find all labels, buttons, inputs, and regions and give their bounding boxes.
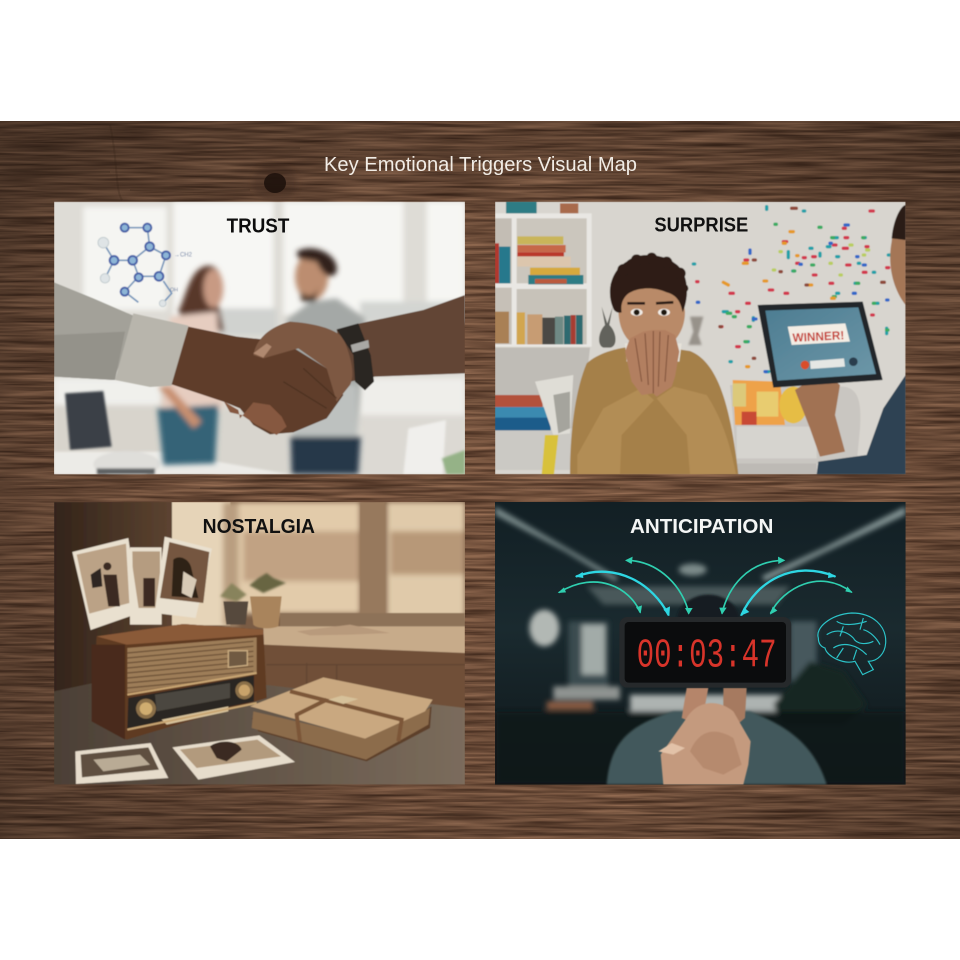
face — [618, 285, 685, 342]
leather journal with twine — [250, 677, 433, 761]
cushions — [535, 375, 807, 435]
clasped hands — [172, 322, 352, 435]
digital countdown timer: 00:03:47 — [637, 634, 777, 680]
sepia room and window — [54, 502, 465, 708]
curly hair — [610, 253, 688, 313]
office background — [54, 202, 467, 475]
woman in background — [157, 266, 223, 465]
panel: trust — [54, 202, 467, 478]
heading: anticipation: ANTICIPATION — [630, 516, 773, 538]
party popper — [542, 435, 558, 474]
room wall — [495, 202, 906, 474]
trust photo scene — [54, 202, 467, 478]
sweater forearms — [577, 388, 654, 474]
nostalgia photo scene — [54, 502, 465, 785]
polaroid photos on wall — [72, 537, 212, 630]
tablet with winner screen — [758, 302, 883, 388]
surprised man — [570, 253, 738, 474]
digital countdown timer — [619, 617, 791, 688]
bookshelf with books — [495, 202, 592, 347]
grey sofa — [495, 348, 860, 474]
right arm with watch — [337, 295, 465, 382]
heading: nostalgia: NOSTALGIA — [203, 516, 315, 538]
tablet with winner screen: WINNER! — [792, 328, 845, 345]
vase and sculpture — [599, 307, 703, 348]
stacked board games — [495, 395, 551, 430]
blurred monitor and desk — [54, 391, 290, 478]
person holding tablet — [795, 205, 906, 474]
hand raising fingers — [658, 688, 751, 785]
icon: molecule diagram: OH — [170, 288, 178, 294]
dark blurred office — [495, 502, 906, 785]
small plants on sill — [220, 573, 390, 635]
sweater — [570, 346, 738, 474]
panel: anticipation — [495, 502, 906, 785]
loose photos on table — [75, 735, 295, 784]
vintage radio — [92, 624, 267, 740]
left arm with shirt sleeve — [54, 282, 188, 387]
blurred person behind timer — [607, 595, 827, 785]
wooden table — [54, 683, 465, 785]
hands over mouth — [625, 330, 679, 397]
icon: glowing brain — [818, 613, 886, 675]
heading: surprise: SURPRISE — [654, 215, 748, 237]
surprise photo scene — [495, 202, 906, 474]
panel: nostalgia — [54, 502, 465, 785]
title: Key Emotional Triggers Visual Map — [324, 154, 637, 176]
panel: surprise — [495, 202, 906, 474]
man in background — [287, 248, 365, 474]
heading: trust: TRUST — [227, 215, 289, 237]
icon: confetti burst — [693, 207, 890, 375]
icon: molecule diagram: →CH2 — [174, 252, 193, 258]
white chair and plant — [403, 420, 465, 474]
wood board background — [0, 121, 960, 839]
wristwatch band — [337, 323, 374, 390]
arrows radiating from timer — [558, 557, 853, 616]
icon: molecule diagram — [98, 224, 193, 307]
